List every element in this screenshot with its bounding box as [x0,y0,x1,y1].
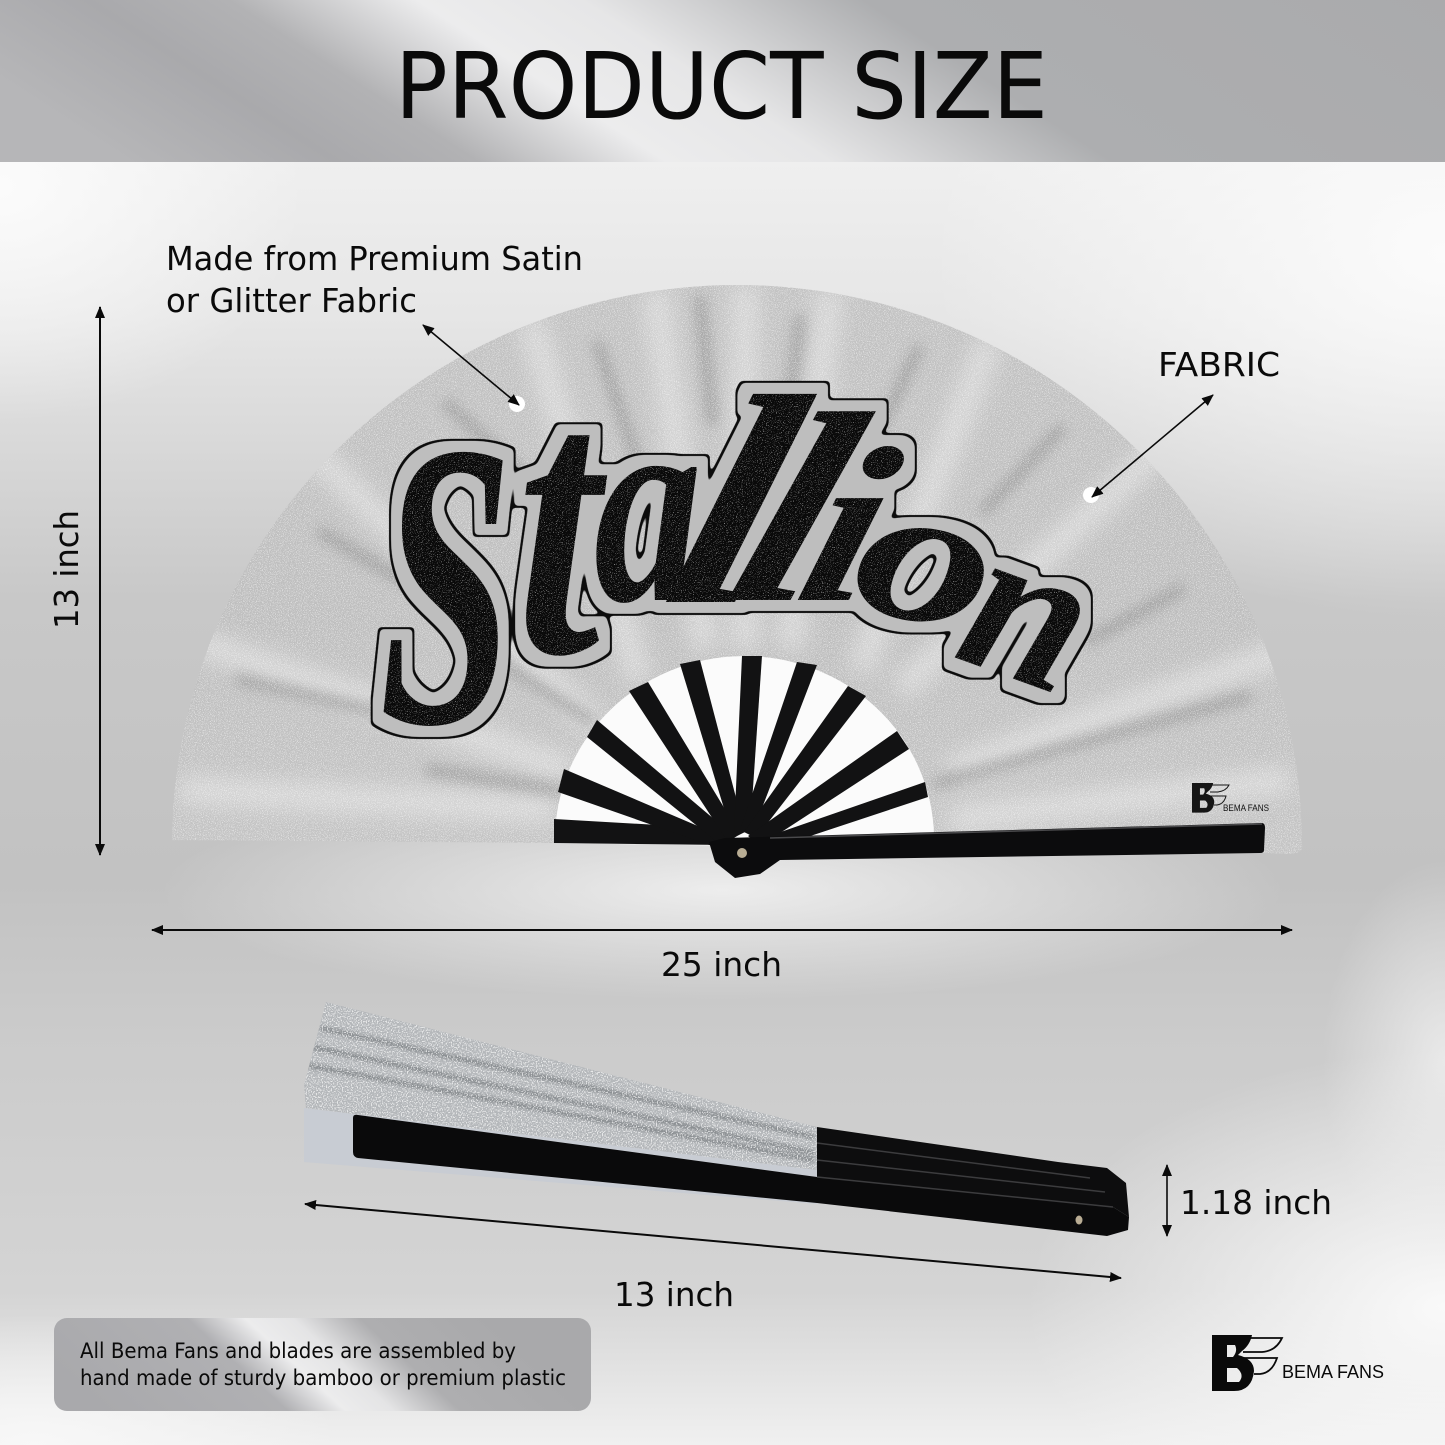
printed word on fan: a [594,346,702,662]
title: PRODUCT SIZE [395,33,1048,140]
label: fan height: 13 inch [47,510,86,629]
fan fabric [160,280,1310,860]
fan ribs [554,656,928,850]
logo: Bema Fans [1212,1335,1384,1391]
label: closed length: 13 inch [614,1275,734,1314]
closed fan sticks [817,1127,1129,1217]
logo: Bema Fans: BEMA FANS [1282,1361,1384,1382]
arrow: fabric note [423,325,519,405]
label: fan width: 25 inch [661,945,782,984]
header band [0,0,1445,162]
text: material note [166,239,583,320]
fabric eyelets [509,396,1099,503]
logo: fan print: BEMA FANS [1223,803,1269,814]
printed word on fan: t [516,309,610,736]
closed fan lower fabric strip [304,1108,817,1204]
callout: assembly note [54,1318,591,1411]
text: material note: Made from Premium Satin [166,239,583,278]
text: material note: or Glitter Fabric [166,281,417,320]
arrow: fan height [99,307,101,855]
printed word on fan: n [935,478,1126,739]
printed word on fan: l [639,335,836,667]
printed word on fan: S [379,360,513,811]
arrow: closed thickness [1166,1165,1168,1236]
callout: assembly note: hand made of sturdy bamboo or premium plastic [80,1366,566,1390]
closed fan glitter pleats [300,1000,820,1175]
printed word on fan: l [700,358,896,659]
label: closed thickness: 1.18 inch [1180,1183,1332,1222]
closed fan front stick [353,1115,1129,1236]
label: fabric: FABRIC [1158,345,1280,384]
printed word on fan: o [835,431,1021,679]
arrow: fan width [152,929,1292,931]
printed word on fan: i [777,402,922,648]
printed word on fan [379,309,1126,811]
logo: fan print [1192,783,1269,814]
inner white window [555,656,934,846]
arrow: closed length [305,1204,1121,1278]
arrow: fabric label [1092,395,1213,497]
closed fan [300,1000,1129,1236]
closed fan rivet [1076,1216,1082,1224]
callout: assembly note: All Bema Fans and blades are assembled by [80,1339,516,1363]
open fan [160,280,1310,878]
fan handle [709,823,1265,878]
